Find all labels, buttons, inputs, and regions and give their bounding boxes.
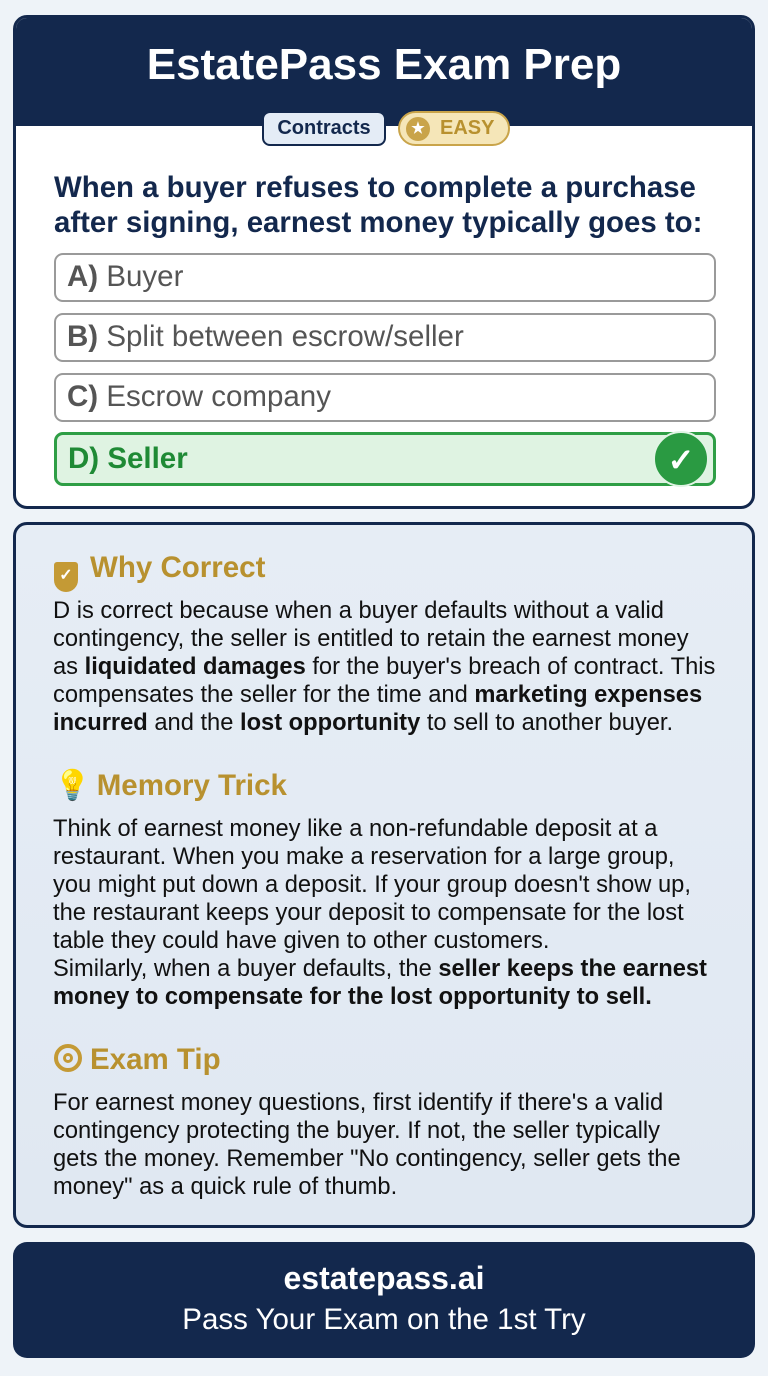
badge: EASY bbox=[398, 111, 510, 146]
heading: Why Correct: Why Correct bbox=[90, 551, 265, 584]
badge: Contracts: Contracts bbox=[277, 117, 371, 139]
text: memory trick: restaurant. When you make a reservation for a large group, bbox=[53, 844, 674, 870]
text: exam tip: For earnest money questions, first identify if there's a valid bbox=[53, 1090, 663, 1116]
text: why correct: contingency, the seller is entitled to retain the earnest money bbox=[53, 626, 689, 652]
text: memory trick: table they could have given to other customers. bbox=[53, 928, 549, 954]
option D correct bbox=[54, 432, 716, 486]
text: memory trick: the restaurant keeps your deposit to compensate for the lost bbox=[53, 900, 684, 926]
text: why correct: incurred and the lost opportunity to sell to another buyer. bbox=[53, 710, 673, 736]
heading: Why Correct bbox=[54, 551, 266, 592]
option B: B) Split between escrow/seller bbox=[67, 320, 464, 353]
text: memory trick: money to compensate for the lost opportunity to sell. bbox=[53, 984, 652, 1010]
title: EstatePass Exam Prep bbox=[147, 40, 621, 89]
badge: EASY: EASY bbox=[440, 117, 494, 139]
heading: Exam Tip: Exam Tip bbox=[90, 1043, 221, 1076]
footer bbox=[13, 1242, 755, 1358]
text: why correct: as liquidated damages for the buyer's breach of contract. This bbox=[53, 654, 715, 680]
footer url: estatepass.ai bbox=[283, 1260, 484, 1296]
heading: Memory Trick: 💡Memory Trick bbox=[54, 769, 287, 802]
text: memory trick: Similarly, when a buyer defaults, the seller keeps the earnest bbox=[53, 956, 707, 982]
text: memory trick bbox=[53, 816, 707, 1010]
text: memory trick: you might put down a deposit. If your group doesn't show up, bbox=[53, 872, 691, 898]
text: memory trick: Think of earnest money like a non-refundable deposit at a bbox=[53, 816, 657, 842]
card: explanation bbox=[13, 522, 755, 1228]
icon: check bbox=[653, 431, 709, 487]
card: question bbox=[13, 15, 755, 509]
text: exam tip: money" as a quick rule of thumb. bbox=[53, 1174, 397, 1200]
text: exam tip: contingency protecting the buyer. If not, the seller typically bbox=[53, 1118, 660, 1144]
text: why correct: compensates the seller for the time and marketing expenses bbox=[53, 682, 702, 708]
badge: Contracts bbox=[262, 111, 386, 146]
badge: EASY: ★ bbox=[411, 120, 425, 137]
option A: A) Buyer bbox=[67, 260, 183, 293]
heading: Why Correct: ✓ bbox=[59, 567, 73, 584]
option A bbox=[54, 253, 716, 302]
text: why correct bbox=[53, 598, 715, 736]
footer tagline: Pass Your Exam on the 1st Try bbox=[182, 1303, 586, 1336]
question text bbox=[54, 171, 702, 239]
header band bbox=[16, 18, 752, 126]
question text: after signing, earnest money typically goes to: bbox=[54, 206, 702, 239]
option C: C) Escrow company bbox=[67, 380, 331, 413]
option B bbox=[54, 313, 716, 362]
question text: When a buyer refuses to complete a purchase bbox=[54, 171, 696, 204]
text: exam tip: gets the money. Remember "No contingency, seller gets the bbox=[53, 1146, 681, 1172]
text: why correct: D is correct because when a buyer defaults without a valid bbox=[53, 598, 664, 624]
text: exam tip bbox=[53, 1090, 681, 1200]
option C bbox=[54, 373, 716, 422]
option D correct: D) Seller bbox=[68, 442, 188, 475]
icon: check: ✓ bbox=[668, 442, 694, 478]
